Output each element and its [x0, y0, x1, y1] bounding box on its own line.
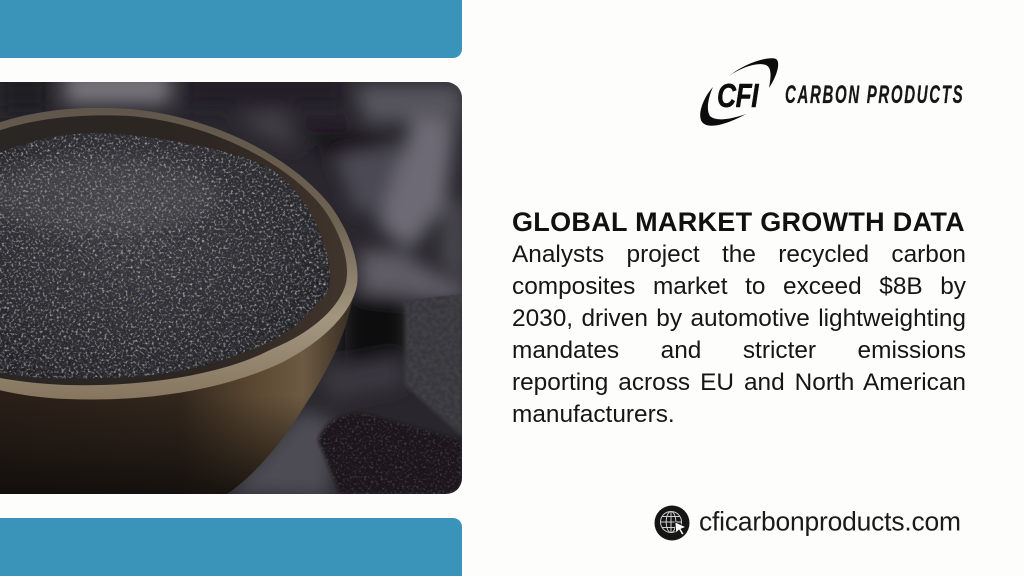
icon: globe with cursor: [654, 506, 690, 540]
bowl body: [0, 297, 353, 494]
website address: cficarbonproducts.com: [699, 506, 961, 536]
body paragraph: mandates and stricter emissions: [512, 337, 966, 364]
body paragraph: composites market to exceed $8B by: [512, 273, 966, 300]
body paragraph: 2030, driven by automotive lightweighting: [512, 305, 966, 332]
top blue bar: [0, 0, 462, 58]
bowl inner wall: [0, 115, 347, 385]
bottom blue bar: [0, 518, 462, 576]
body paragraph: Analysts project the recycled carbon: [512, 241, 966, 268]
logo letters CFI: CFI: [717, 78, 759, 115]
photo background: blurred charcoal: [0, 72, 466, 498]
logo swoosh top: [729, 58, 778, 88]
heading: GLOBAL MARKET GROWTH DATA: [512, 207, 965, 237]
body paragraph: reporting across EU and North American: [512, 369, 966, 396]
website row: [654, 506, 961, 540]
logo wordmark: CARBON PRODUCTS: [785, 81, 963, 109]
photo: bowl of carbon powder: [0, 82, 462, 494]
logo swoosh bottom: [700, 87, 746, 126]
body paragraph: [512, 241, 966, 428]
logo: CFI Carbon Products: [700, 58, 963, 126]
carbon powder: [0, 130, 340, 385]
bowl rim: [0, 108, 358, 400]
body paragraph: manufacturers.: [512, 401, 675, 428]
